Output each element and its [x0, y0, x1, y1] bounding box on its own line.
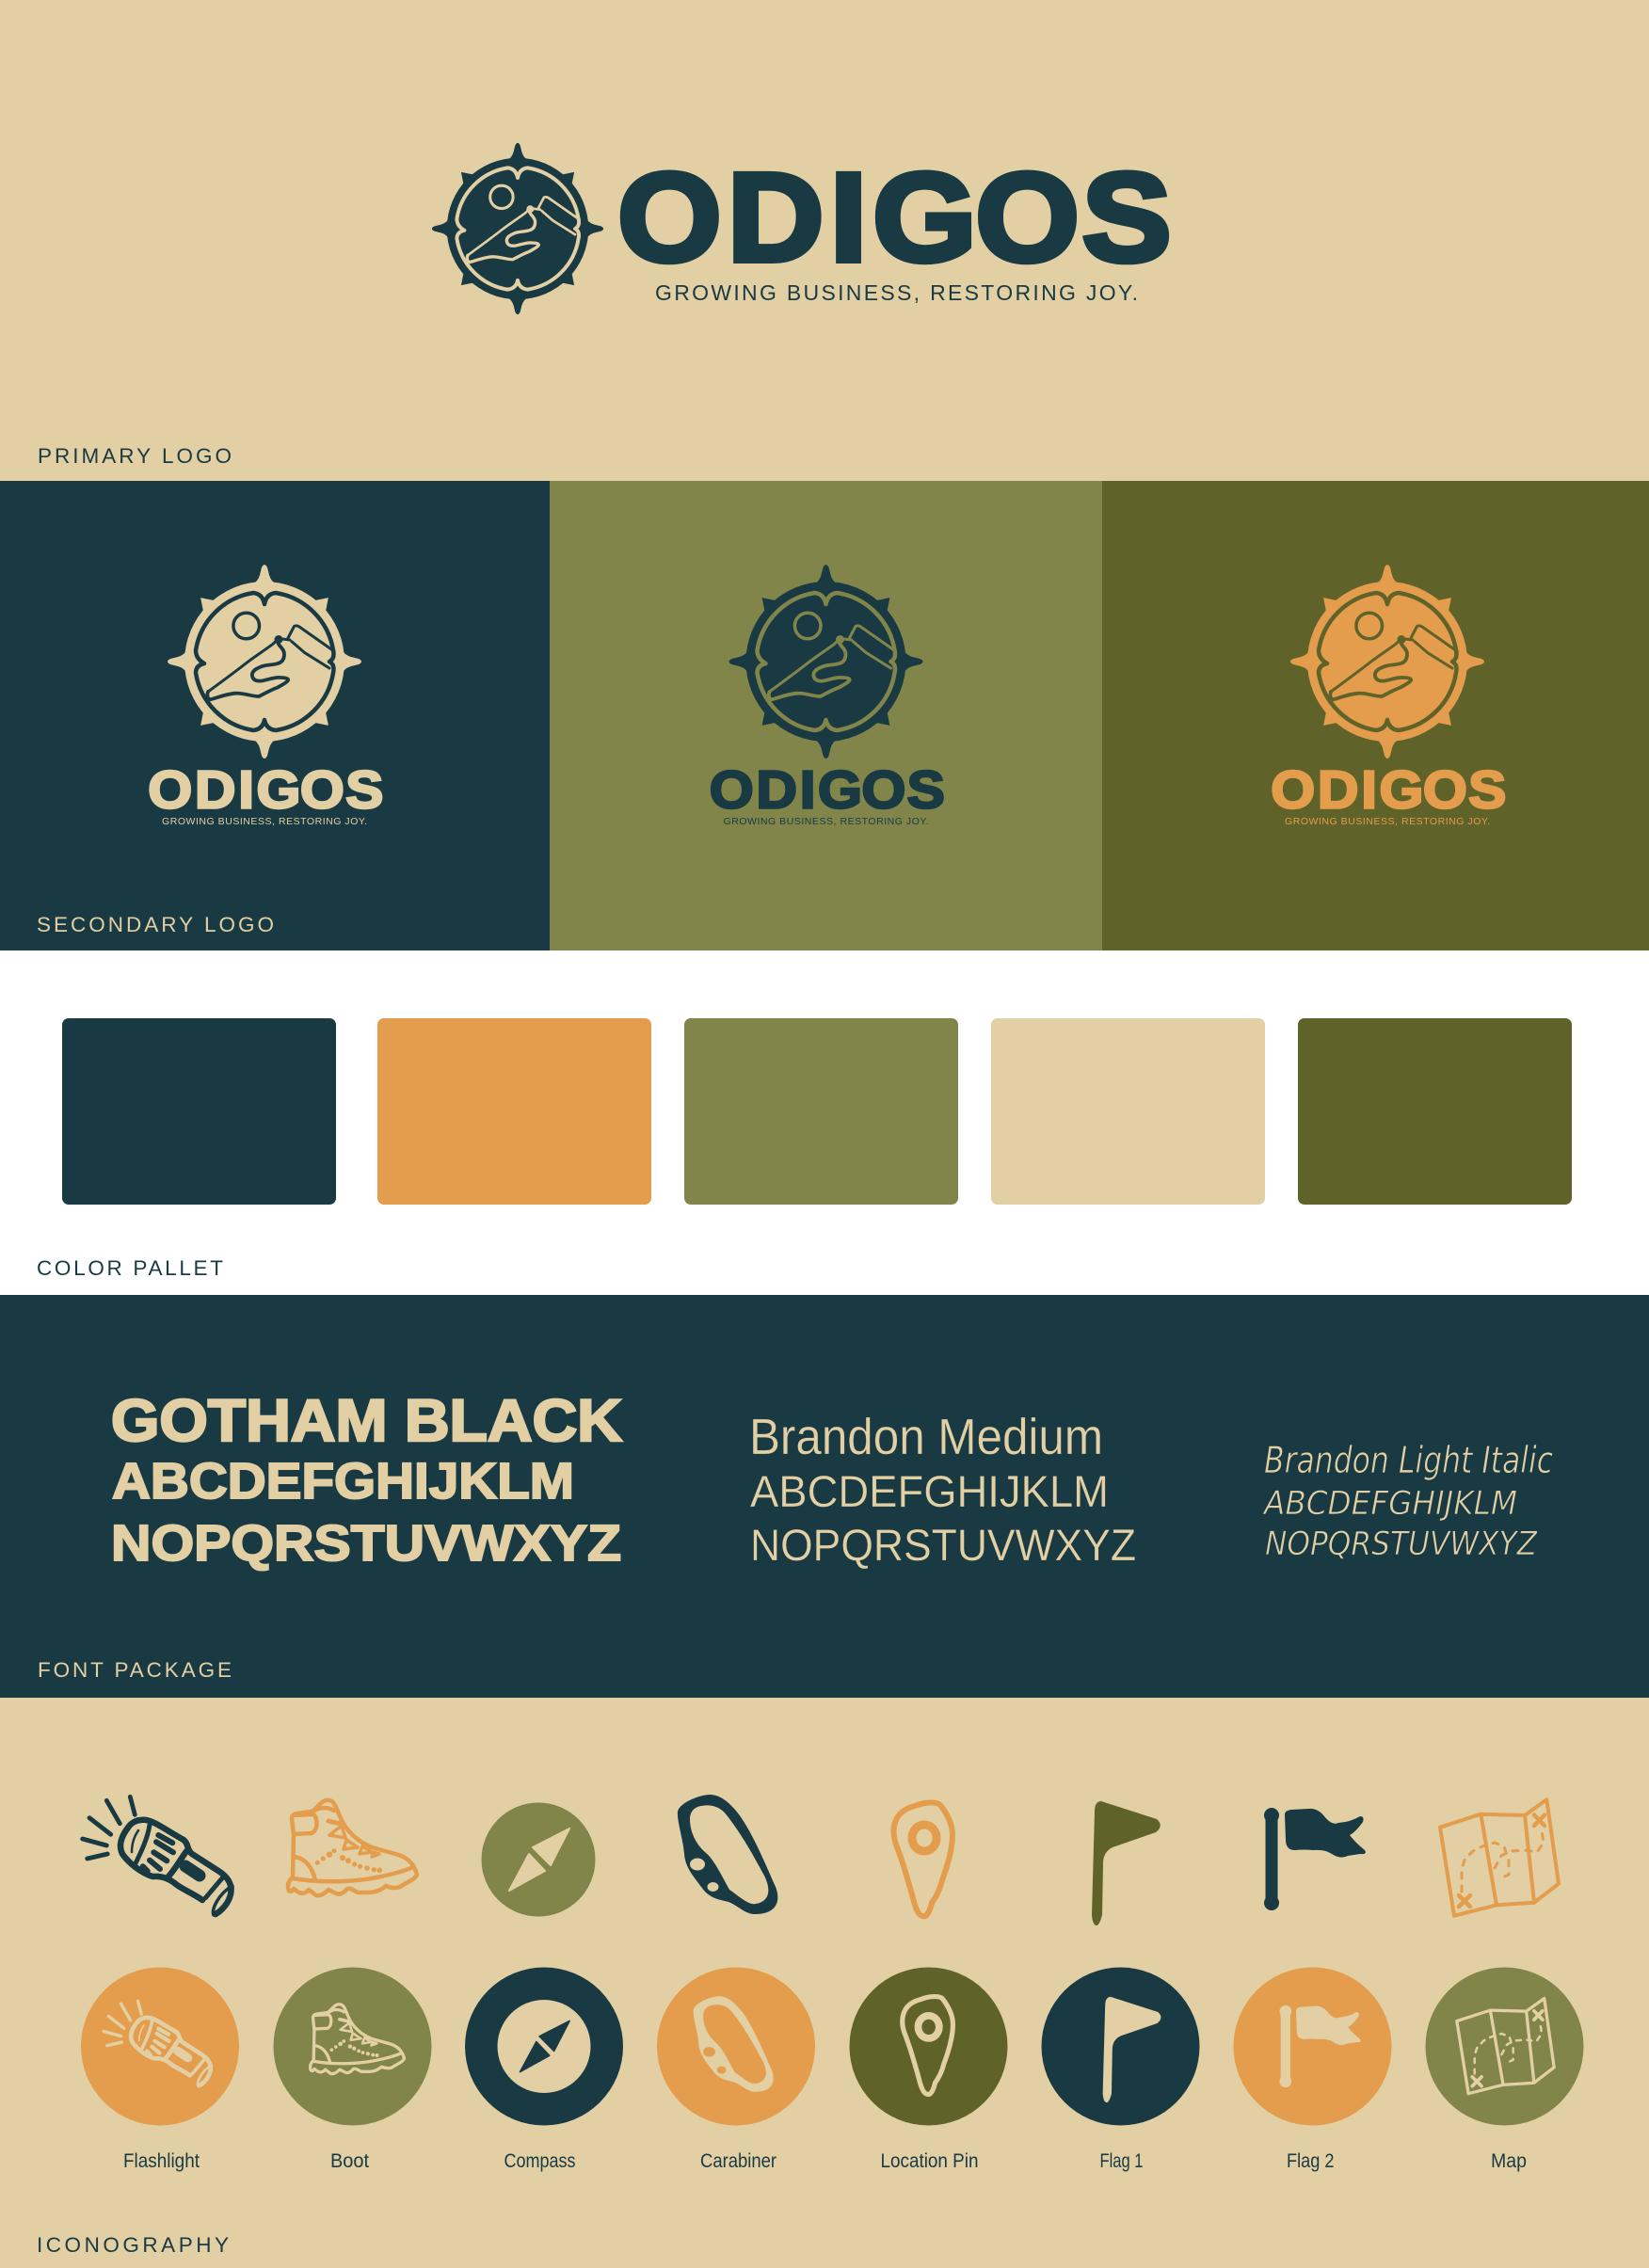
icon: location pin orange — [894, 1802, 953, 1916]
font sample: Gotham Black — [111, 1388, 622, 1572]
font sample: Gotham Black: ABCDEFGHIJKLM — [112, 1453, 574, 1509]
badge: boot — [273, 1967, 431, 2125]
badge: compass — [465, 1967, 623, 2125]
panel: color palette — [0, 950, 1649, 1295]
swatches — [62, 1018, 1572, 1205]
badge: map — [1425, 1967, 1583, 2125]
icon: primary compass mountain emblem — [432, 143, 603, 314]
section label: primary logo: PRIMARY LOGO — [38, 444, 232, 468]
font sample: Brandon Medium: Brandon Medium — [749, 1409, 1103, 1465]
section label: font package: FONT PACKAGE — [38, 1658, 232, 1682]
secondary logo: orange on dark olive — [1271, 565, 1506, 827]
icon: compass olive — [482, 1803, 595, 1916]
panel: primary logo section — [0, 0, 1649, 481]
icon captions: Carabiner — [700, 2150, 776, 2172]
font sample: Brandon Medium: NOPQRSTUVWXYZ — [750, 1520, 1136, 1570]
badge: flashlight — [81, 1967, 239, 2125]
icon captions: Flag 1 — [1099, 2150, 1143, 2172]
section label: iconography: ICONOGRAPHY — [37, 2233, 229, 2257]
primary tagline: GROWING BUSINESS, RESTORING JOY. — [655, 280, 1138, 305]
badge: carabiner — [657, 1967, 815, 2125]
font sample: Brandon Light Italic: ABCDEFGHIJKLM — [1262, 1485, 1517, 1523]
wordmark: ODIGOS — [710, 760, 945, 820]
tagline: GROWING BUSINESS, RESTORING JOY. — [1285, 816, 1490, 827]
icon: boot orange — [288, 1800, 417, 1895]
section label: secondary logo: SECONDARY LOGO — [37, 913, 274, 936]
swatch: sand — [991, 1018, 1265, 1205]
font sample: Brandon Light Italic — [1262, 1440, 1553, 1563]
icon: map orange — [1440, 1799, 1559, 1916]
font sample: Gotham Black: NOPQRSTUVWXYZ — [111, 1515, 621, 1572]
font sample: Brandon Medium — [749, 1409, 1136, 1570]
icon: flag 2 navy — [1264, 1808, 1366, 1910]
icon captions: Location Pin — [881, 2150, 979, 2172]
icon: flashlight navy — [83, 1797, 232, 1915]
section label: color pallet: COLOR PALLET — [37, 1256, 223, 1280]
swatch: orange — [377, 1018, 651, 1205]
icon captions — [123, 2150, 1527, 2172]
font sample: Gotham Black: GOTHAM BLACK — [111, 1388, 622, 1454]
font sample: Brandon Medium: ABCDEFGHIJKLM — [750, 1466, 1109, 1516]
icon: orange emblem — [1290, 565, 1484, 759]
tagline: GROWING BUSINESS, RESTORING JOY. — [723, 816, 928, 827]
primary wordmark: ODIGOS — [617, 148, 1172, 288]
panel: iconography — [0, 1698, 1649, 2268]
icon captions: Compass — [504, 2150, 576, 2172]
swatch: olive — [684, 1018, 958, 1205]
icon captions: Map — [1491, 2150, 1527, 2172]
secondary logo: navy on olive — [710, 565, 945, 827]
icon: navy emblem — [728, 565, 922, 759]
wordmark: ODIGOS — [1271, 760, 1506, 820]
badge: flag 2 — [1233, 1967, 1391, 2125]
icon: flag 1 dark olive — [1092, 1801, 1161, 1925]
wordmark: ODIGOS — [148, 760, 383, 820]
icon captions: Flag 2 — [1287, 2150, 1335, 2172]
icon captions: Flashlight — [123, 2150, 200, 2172]
panel: secondary logo olive — [550, 481, 1102, 950]
panel: secondary logo navy — [0, 481, 550, 950]
font sample: Brandon Light Italic: Brandon Light Italic — [1264, 1440, 1553, 1482]
badge: flag 1 — [1041, 1967, 1199, 2125]
icon captions: Boot — [330, 2150, 369, 2172]
panel: font package — [0, 1295, 1649, 1698]
tagline: GROWING BUSINESS, RESTORING JOY. — [162, 816, 367, 827]
font sample: Brandon Light Italic: NOPQRSTUVWXYZ — [1265, 1525, 1538, 1563]
icon: carabiner navy — [678, 1795, 777, 1914]
panel: secondary logo dark olive — [1102, 481, 1649, 950]
swatch: navy — [62, 1018, 336, 1205]
secondary logo: cream on navy — [148, 565, 383, 827]
icon: cream emblem — [168, 565, 361, 759]
swatch: dark olive — [1298, 1018, 1572, 1205]
primary logo — [432, 143, 1172, 314]
badge: location pin — [849, 1967, 1007, 2125]
